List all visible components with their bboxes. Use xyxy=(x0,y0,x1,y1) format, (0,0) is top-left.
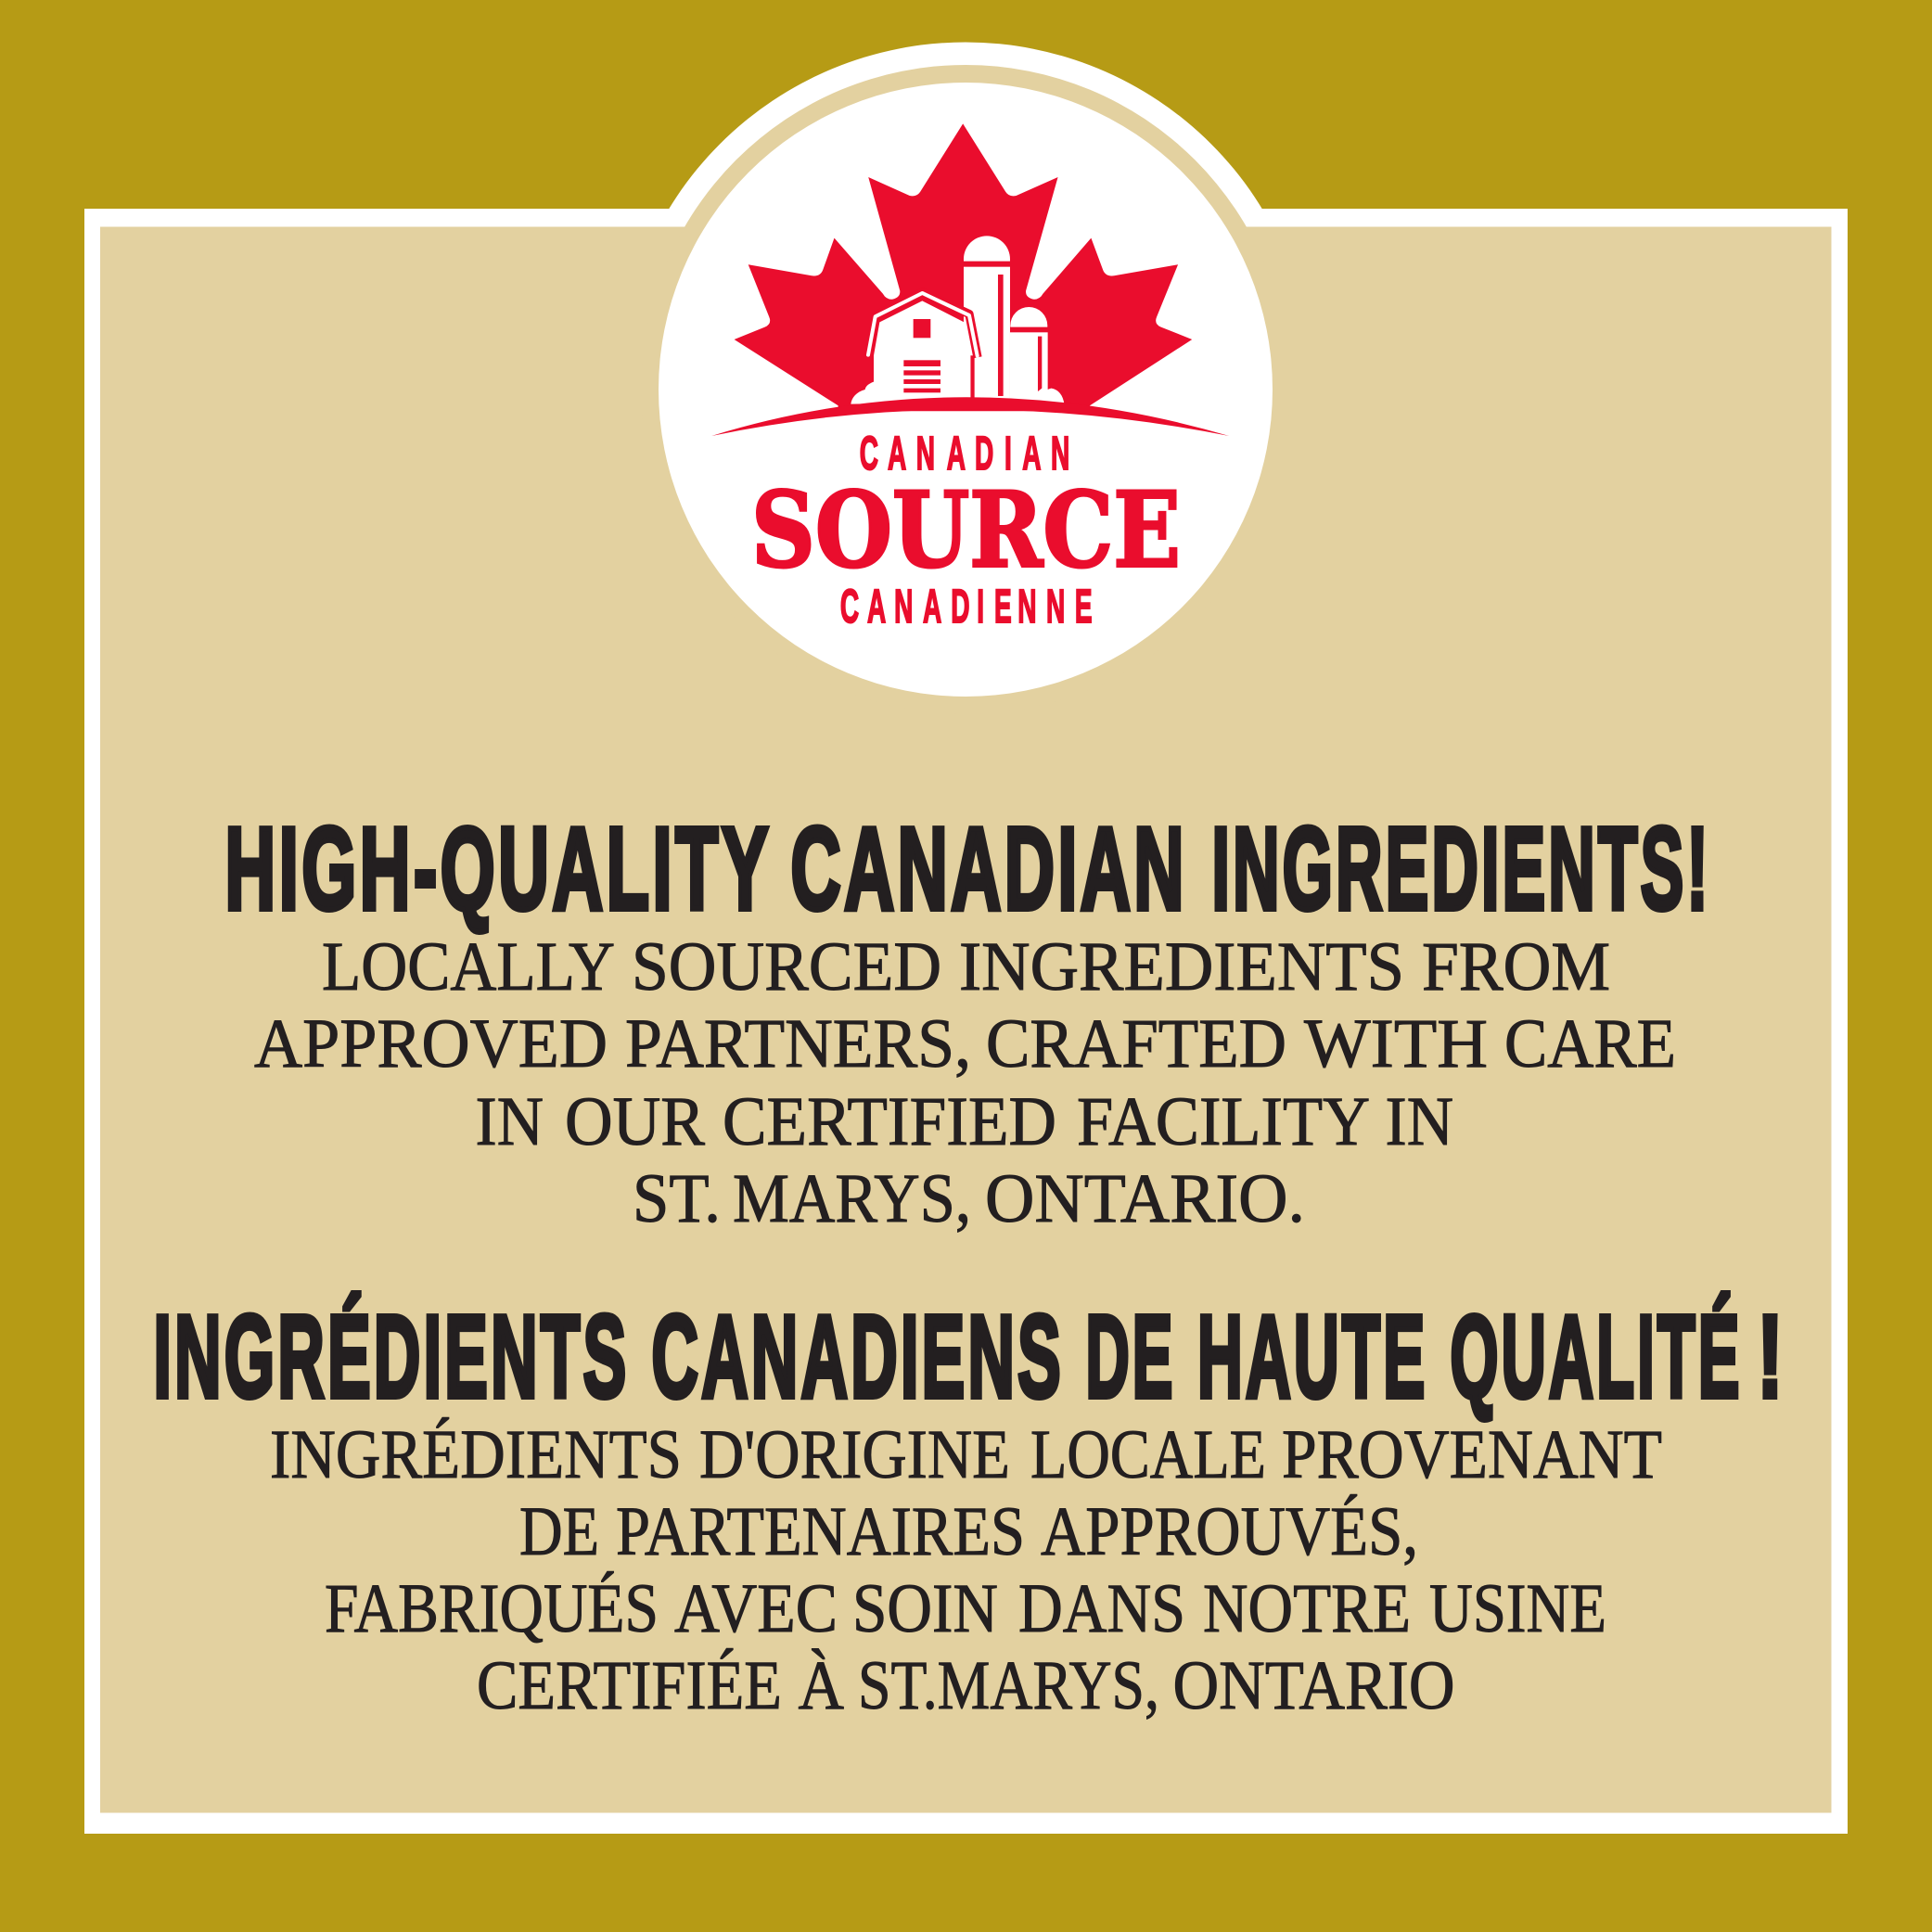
heading: French xyxy=(154,1290,1786,1422)
text block: French description: CERTIFIÉE xyxy=(477,1647,782,1724)
text block: French description: LOCALE xyxy=(1030,1416,1266,1493)
logo text: Canadian: CANADIAN xyxy=(860,427,1069,480)
text block: English description: CARE xyxy=(1504,1005,1676,1082)
text block: French description: DE xyxy=(519,1493,599,1570)
text block: English description: CRAFTED xyxy=(986,1005,1286,1082)
heading: French: DE xyxy=(1085,1290,1176,1422)
badge: white logo circle xyxy=(659,83,1273,697)
heading: English: HIGH-QUALITY xyxy=(224,802,772,934)
text block: English description: IN xyxy=(475,1083,544,1160)
text block: French description: AVEC xyxy=(674,1570,838,1647)
text block: English description: WITH xyxy=(1304,1005,1488,1082)
text block: French description: APPROUVÉS, xyxy=(1041,1493,1418,1570)
heading: French: INGRÉDIENTS xyxy=(154,1290,629,1422)
heading: English: CANADIAN xyxy=(790,802,1187,934)
text block: English description: OUR xyxy=(565,1083,705,1160)
text block: English description: MARYS, xyxy=(733,1160,971,1237)
text block: French description: PARTENAIRES xyxy=(616,1493,1025,1570)
icon: hill curve xyxy=(711,397,1229,436)
text block: English description: IN xyxy=(1386,1083,1453,1160)
logo: Canadian Source xyxy=(711,123,1229,633)
text block: French description: NOTRE xyxy=(1203,1570,1411,1647)
heading: French: ! xyxy=(1757,1290,1786,1422)
text block: English description: FACILITY xyxy=(1077,1083,1370,1160)
text block: English description: CERTIFIED xyxy=(723,1083,1056,1160)
logo text: Canadienne: CANADIENNE xyxy=(840,580,1093,633)
text block: English description: SOURCED xyxy=(632,928,941,1005)
text block: French description: ONTARIO xyxy=(1172,1647,1454,1724)
icon: barn and silos xyxy=(851,236,1064,404)
text block: French description: PROVENANT xyxy=(1282,1416,1662,1493)
text block: French description: SOIN xyxy=(852,1570,998,1647)
text block: English description: PARTNERS, xyxy=(625,1005,971,1082)
heading: French: HAUTE xyxy=(1197,1290,1428,1422)
heading: French: CANADIENS xyxy=(651,1290,1064,1422)
text block: French description: INGRÉDIENTS xyxy=(270,1416,682,1493)
text block: French description xyxy=(270,1416,1662,1724)
text block: French description: D'ORIGINE xyxy=(699,1416,1010,1493)
logo text: Source: SOURCE xyxy=(751,471,1181,592)
heading: English xyxy=(224,802,1711,934)
icon: maple leaf xyxy=(735,123,1192,411)
text block: English description: APPROVED xyxy=(254,1005,608,1082)
text block: French description: USINE xyxy=(1429,1570,1606,1647)
text block: French description: À xyxy=(798,1647,844,1724)
text block: French description: ST.MARYS, xyxy=(858,1647,1159,1724)
text block: English description xyxy=(254,928,1676,1237)
text block: English description: LOCALLY xyxy=(322,928,615,1005)
text block: English description: FROM xyxy=(1422,928,1610,1005)
text block: French description: FABRIQUÉS xyxy=(325,1570,659,1647)
text block: English description: INGREDIENTS xyxy=(959,928,1404,1005)
text block: English description: ONTARIO. xyxy=(985,1160,1305,1237)
text block: English description: ST. xyxy=(633,1160,721,1237)
text block: French description: DANS xyxy=(1018,1570,1185,1647)
